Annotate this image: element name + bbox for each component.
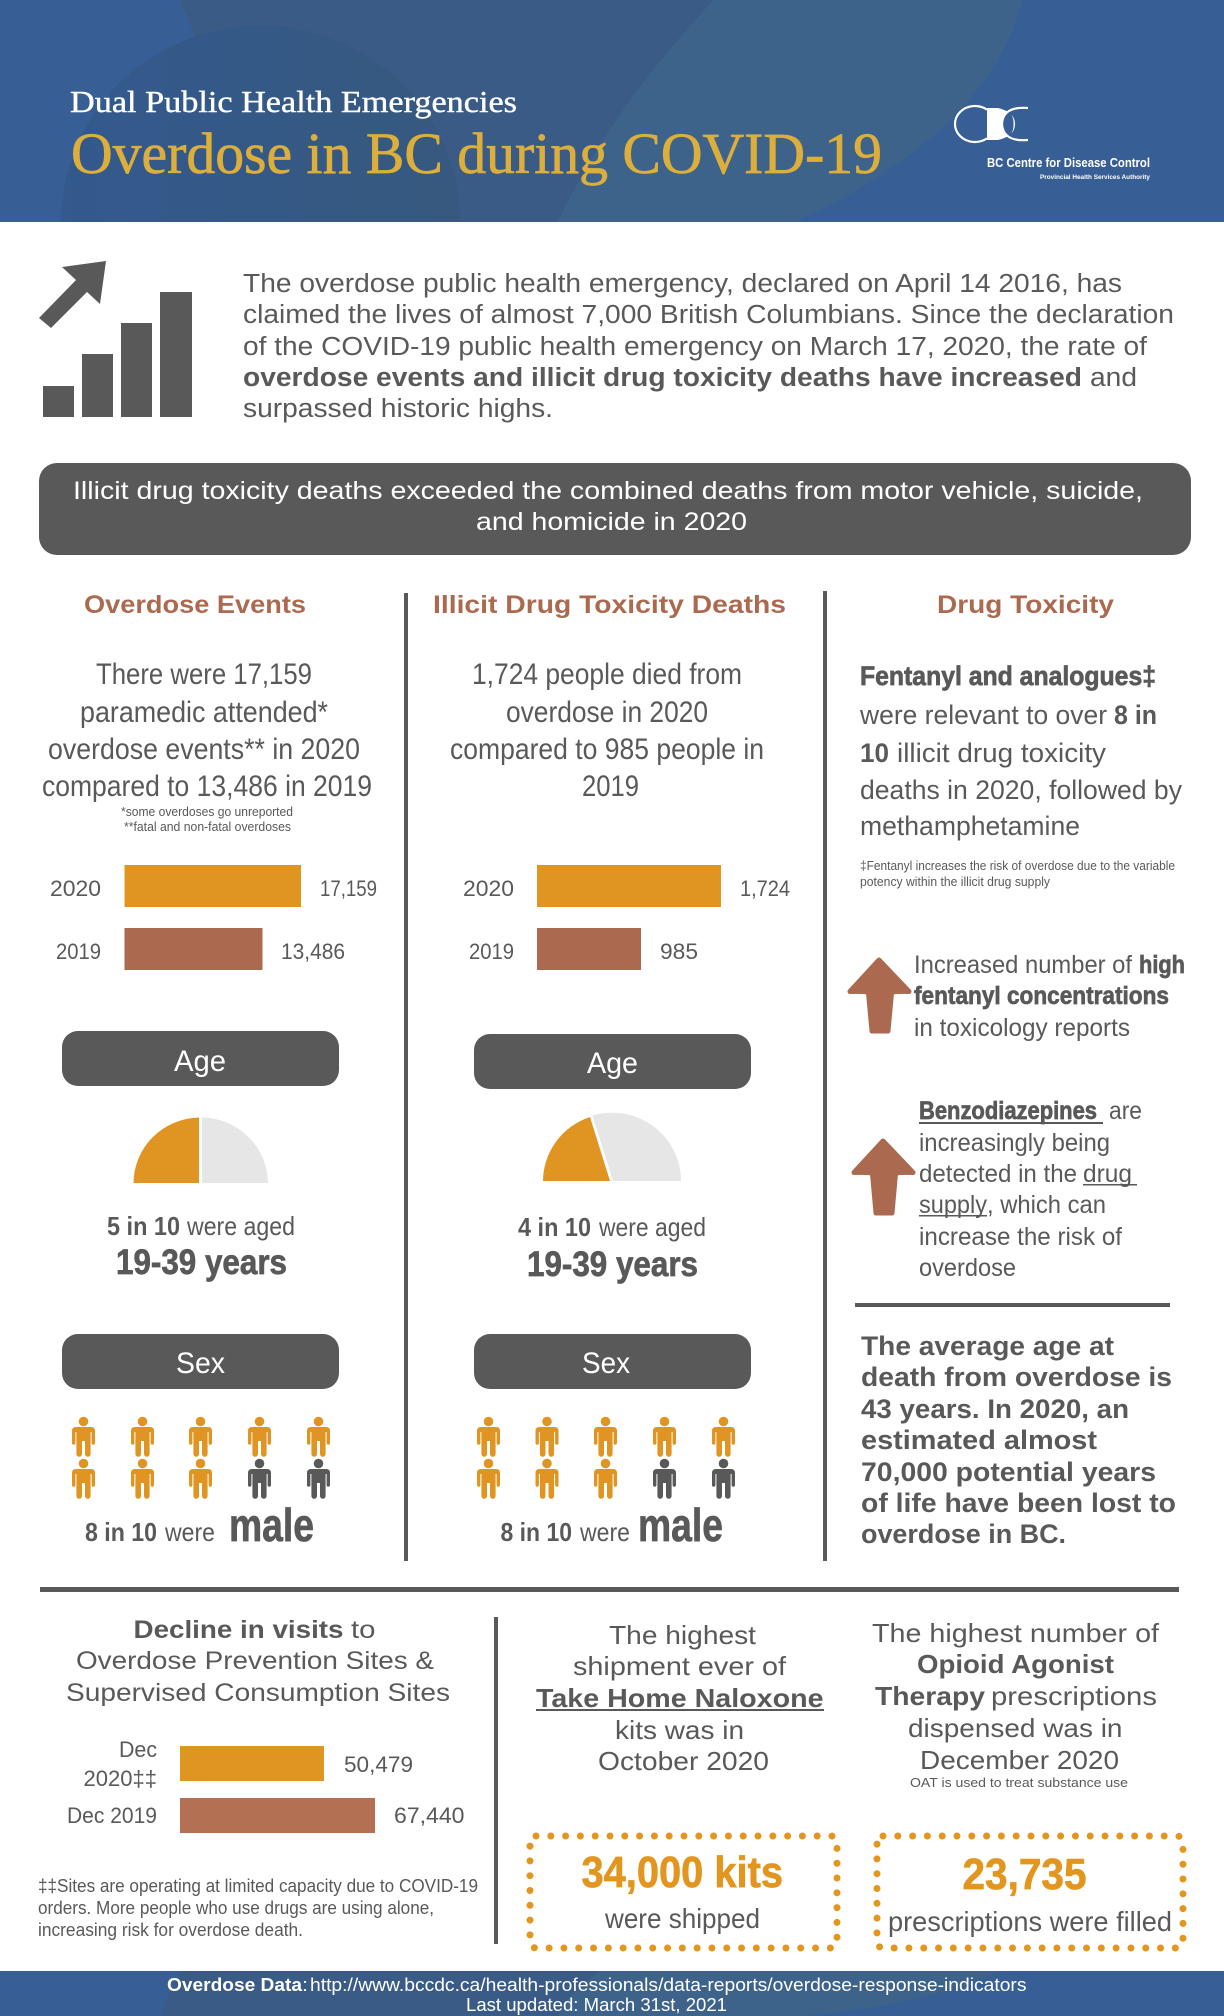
- text: benzodiazepines: increase the risk of: [919, 1223, 1122, 1251]
- footer last updated: Last updated: March 31st, 2021: [466, 1995, 727, 2015]
- text: OAT statement: The highest number of: [872, 1618, 1160, 1648]
- text: age statement: 19-39 years: [527, 1245, 698, 1284]
- text: fentanyl and analogues: illicit drug toxicity: [897, 738, 1107, 768]
- text: average age at death: overdose in BC.: [861, 1519, 1066, 1549]
- logo: BC Centre for Disease Control: Provincial Health Services Authority: [1040, 174, 1150, 181]
- header subtitle: Dual Public Health Emergencies: [70, 84, 517, 119]
- text: overdose events summary: paramedic attended*: [80, 696, 328, 729]
- text: naloxone statement: shipment ever of: [573, 1651, 787, 1681]
- text: overdose events summary: There were 17,159: [96, 658, 312, 691]
- text: fentanyl and analogues: 8 in: [1114, 700, 1157, 730]
- callout banner: [39, 463, 1191, 555]
- footnote: limited capacity: increasing risk for overdose death.: [38, 1920, 303, 1940]
- text: sex statement: male: [229, 1499, 314, 1551]
- header title: Overdose in BC during COVID-19: [71, 121, 882, 186]
- panel: decline in visits: [38, 1616, 478, 1940]
- text: sex statement: 8 in 10: [85, 1517, 157, 1547]
- text: benzodiazepines: are: [1109, 1097, 1142, 1125]
- sex pill: [62, 1334, 339, 1389]
- intro paragraph: The overdose public health emergency, declared on April 14 2016, has: [243, 270, 1122, 298]
- text: benzodiazepines: supply: [919, 1191, 987, 1219]
- text: fentanyl and analogues: 10: [860, 738, 889, 768]
- text: average age at death: The average age at: [861, 1331, 1114, 1361]
- intro paragraph: overdose events and illicit drug toxicity deaths have increased: [243, 364, 1082, 392]
- text: average age at death: 43 years. In 2020, an: [861, 1394, 1129, 1424]
- text: deaths summary: 1,724 people died from: [472, 658, 742, 691]
- footnote: fentanyl: ‡Fentanyl increases the risk of overdose due to the variable: [860, 858, 1175, 873]
- bar chart: site visits: [67, 1737, 464, 1833]
- bar chart: deaths: 2019: [469, 939, 514, 964]
- bar chart: overdose events: 2020: [50, 876, 101, 901]
- text: age statement: were aged: [598, 1212, 706, 1242]
- text: deaths summary: compared to 985 people in: [450, 733, 764, 766]
- text: fentanyl and analogues: Fentanyl and analogues‡: [860, 661, 1156, 691]
- half pie: 5 in 10: [134, 1118, 268, 1183]
- footnote: fentanyl: [860, 858, 1175, 889]
- text: sex statement: [85, 1499, 314, 1551]
- text: high fentanyl concentrations: in toxicology reports: [914, 1014, 1130, 1042]
- text: naloxone statement: kits was in: [615, 1715, 744, 1745]
- panel: overdose events: [42, 591, 377, 1551]
- footnotes: **fatal and non-fatal overdoses: [124, 819, 291, 834]
- text: sex statement: 8 in 10: [500, 1517, 572, 1547]
- text: naloxone statement: [536, 1620, 824, 1776]
- bar chart: deaths: 2020: [463, 876, 514, 901]
- text: benzodiazepines: , which can: [987, 1191, 1106, 1219]
- bar chart: deaths: 1,724: [740, 876, 790, 901]
- panel: drug toxicity: [850, 591, 1185, 1549]
- bar chart: deaths: 985: [660, 939, 698, 964]
- pictogram: 8 in 10 male: [477, 1417, 735, 1499]
- bar chart: site visits: 50,479: [344, 1752, 413, 1777]
- intro paragraph: [243, 270, 1174, 423]
- footnote: limited capacity: [38, 1876, 478, 1940]
- heading: decline in visits: Decline in visits: [134, 1616, 344, 1644]
- text: average age at death: death from overdose is: [861, 1362, 1172, 1392]
- intro paragraph: surpassed historic highs.: [243, 395, 553, 423]
- bar chart: overdose events: 17,159: [320, 876, 377, 901]
- stat box: 23,735 prescriptions: prescriptions were filled: [888, 1906, 1172, 1937]
- logo: BC Centre for Disease Control: BC Centre for Disease Control: [987, 155, 1150, 170]
- text: OAT statement: Opioid Agonist: [917, 1649, 1114, 1679]
- text: benzodiazepines: increasingly being: [919, 1129, 1110, 1157]
- bar chart: overdose events: 2019: [56, 939, 101, 964]
- text: age statement: 4 in 10: [518, 1212, 591, 1242]
- heading: overdose events: Overdose Events: [84, 591, 306, 619]
- bar chart: site visits: Dec 2019: [67, 1803, 157, 1828]
- text: fentanyl and analogues: deaths in 2020, followed by: [860, 775, 1182, 805]
- text: high fentanyl concentrations: [914, 951, 1185, 1042]
- text: average age at death: estimated almost: [861, 1425, 1097, 1455]
- icon: rising bar chart with arrow: [39, 261, 192, 417]
- divider: between deaths and drug toxicity: [823, 591, 827, 1561]
- text: benzodiazepines: Benzodiazepines: [919, 1097, 1097, 1125]
- text: average age at death: of life have been lost to: [861, 1488, 1176, 1518]
- text: OAT statement: [872, 1618, 1160, 1790]
- bar chart: site visits: 2020‡‡: [84, 1766, 157, 1791]
- callout banner: Illicit drug toxicity deaths exceeded the combined deaths from motor vehicle, suicide,: [73, 477, 1143, 505]
- half pie: 4 in 10: [543, 1113, 681, 1181]
- text: high fentanyl concentrations: Increased number of: [914, 951, 1132, 979]
- divider: [855, 1303, 1170, 1307]
- arrow: up, benzodiazepines: [854, 1141, 913, 1213]
- panel: opioid agonist therapy: [872, 1618, 1183, 1948]
- text: naloxone statement: Take Home Naloxone: [536, 1683, 824, 1713]
- text: high fentanyl concentrations: high: [1139, 951, 1185, 979]
- heading: decline in visits: to: [351, 1616, 376, 1644]
- heading: illicit drug toxicity deaths: Illicit Drug Toxicity Deaths: [433, 591, 786, 619]
- panel: take home naloxone: [530, 1620, 837, 1948]
- text: OAT statement: Therapy: [875, 1681, 986, 1711]
- text: benzodiazepines: [919, 1097, 1142, 1282]
- footnotes: [121, 804, 293, 834]
- header banner: [0, 0, 1224, 222]
- panel: illicit drug toxicity deaths: [433, 591, 790, 1551]
- text: overdose events summary: [42, 658, 372, 803]
- sex pill: [474, 1334, 751, 1389]
- stat box: 34,000 kits: were shipped: [604, 1903, 760, 1934]
- heading: decline in visits: Overdose Prevention Sites &: [76, 1647, 434, 1675]
- text: fentanyl and analogues: were relevant to over: [859, 700, 1107, 730]
- text: sex statement: [500, 1499, 723, 1551]
- text: sex statement: were: [579, 1517, 630, 1547]
- text: overdose events summary: overdose events** in 2020: [48, 733, 360, 766]
- text: OAT statement: OAT is used to treat substance use: [910, 1775, 1128, 1790]
- text: fentanyl and analogues: methamphetamine: [860, 811, 1080, 841]
- text: age statement: were aged: [186, 1211, 295, 1241]
- divider: between events and deaths: [404, 593, 408, 1561]
- footnote: fentanyl: potency within the illicit drug supply: [860, 874, 1050, 889]
- text: benzodiazepines: detected in the: [919, 1160, 1077, 1188]
- bar chart: site visits: 67,440: [394, 1803, 464, 1828]
- intro paragraph: and: [1090, 364, 1137, 392]
- text: high fentanyl concentrations: fentanyl concentrations: [914, 982, 1169, 1010]
- heading: decline in visits: [66, 1616, 450, 1707]
- bar chart: overdose events: [50, 865, 377, 970]
- stat box: 34,000 kits: [530, 1836, 837, 1948]
- footnote: limited capacity: ‡‡Sites are operating at limited capacity due to COVID-19: [38, 1876, 478, 1896]
- text: OAT statement: dispensed was in: [908, 1713, 1122, 1743]
- footer: [0, 1971, 1224, 2016]
- text: OAT statement: December 2020: [920, 1745, 1119, 1775]
- text: average age at death: [861, 1331, 1176, 1549]
- text: OAT statement: prescriptions: [991, 1681, 1157, 1711]
- sex pill: Sex: [176, 1347, 225, 1380]
- footer source line: Overdose Data: [167, 1975, 303, 1995]
- age pill: [474, 1034, 751, 1089]
- logo: BC Centre for Disease Control: [955, 106, 1150, 181]
- text: deaths summary: [450, 658, 764, 803]
- stat box: 23,735 prescriptions: [877, 1836, 1183, 1948]
- footer source line: :: [302, 1975, 308, 1995]
- text: overdose events summary: compared to 13,486 in 2019: [42, 770, 372, 803]
- text: age statement: [518, 1212, 706, 1284]
- age pill: Age: [174, 1045, 226, 1078]
- sex pill: Sex: [582, 1347, 630, 1380]
- text: benzodiazepines: drug: [1083, 1160, 1132, 1188]
- stat box: 23,735 prescriptions: 23,735: [962, 1850, 1086, 1899]
- age pill: [62, 1031, 339, 1086]
- text: naloxone statement: October 2020: [598, 1746, 769, 1776]
- text: fentanyl and analogues: [859, 661, 1182, 841]
- intro paragraph: claimed the lives of almost 7,000 British Columbians. Since the declaration: [243, 301, 1174, 329]
- divider: vertical lower section: [494, 1617, 498, 1944]
- heading: drug toxicity: Drug Toxicity: [937, 591, 1114, 619]
- divider: horizontal above lower section: [40, 1587, 1179, 1592]
- footnote: limited capacity: orders. More people who use drugs are using alone,: [38, 1898, 434, 1918]
- text: age statement: 5 in 10: [107, 1211, 180, 1241]
- callout banner: and homicide in 2020: [476, 508, 747, 536]
- pictogram: 8 in 10 male: [72, 1417, 330, 1499]
- text: sex statement: male: [638, 1499, 723, 1551]
- intro paragraph: of the COVID-19 public health emergency on March 17, 2020, the rate of: [243, 333, 1148, 361]
- heading: decline in visits: Supervised Consumption Sites: [66, 1679, 450, 1707]
- text: deaths summary: 2019: [582, 770, 639, 803]
- bar chart: overdose events: 13,486: [281, 939, 345, 964]
- text: average age at death: 70,000 potential years: [861, 1457, 1156, 1487]
- text: naloxone statement: The highest: [609, 1620, 757, 1650]
- bar chart: site visits: Dec: [119, 1737, 157, 1762]
- text: deaths summary: overdose in 2020: [506, 696, 708, 729]
- text: benzodiazepines: overdose: [919, 1254, 1016, 1282]
- age pill: Age: [587, 1047, 638, 1080]
- bar chart: deaths: [463, 865, 790, 970]
- text: sex statement: were: [164, 1517, 215, 1547]
- stat box: 34,000 kits: 34,000 kits: [582, 1848, 783, 1897]
- footnotes: *some overdoses go unreported: [121, 804, 293, 819]
- text: age statement: [107, 1211, 295, 1282]
- arrow: up, high fentanyl: [850, 960, 909, 1031]
- text: age statement: 19-39 years: [116, 1243, 287, 1282]
- footer source line: http://www.bccdc.ca/health-professionals/data-reports/overdose-response-indicators: [310, 1975, 1026, 1995]
